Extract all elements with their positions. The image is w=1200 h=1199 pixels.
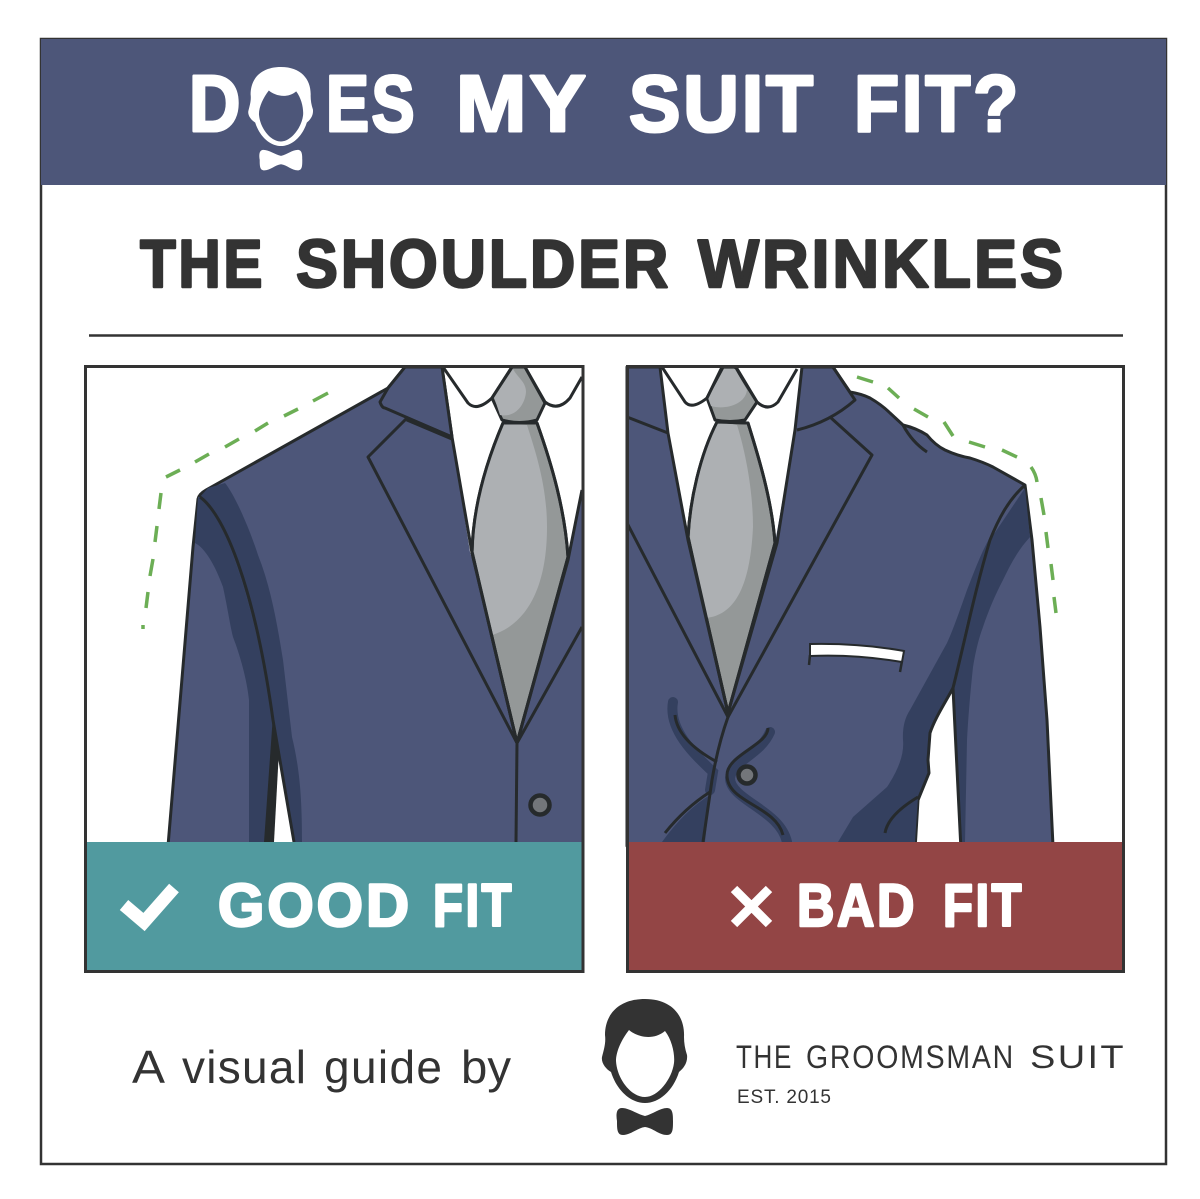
- button wrinkles: [672, 702, 787, 842]
- footer credit: by: [461, 1041, 511, 1093]
- label: bad fit: FIT: [943, 872, 1024, 939]
- label: bad fit: [629, 842, 1123, 970]
- title: [189, 59, 1021, 148]
- label: good fit: [87, 842, 582, 970]
- title: ES: [326, 59, 417, 148]
- collar: [443, 367, 582, 407]
- collar: [662, 367, 797, 407]
- jacket body: [168, 367, 583, 846]
- tie: [688, 367, 775, 713]
- label: good fit: FIT: [433, 872, 514, 939]
- sleeve gap: [915, 688, 961, 850]
- footer credit: [132, 1041, 511, 1093]
- label: bad fit: BAD: [797, 872, 917, 939]
- lapels: [368, 367, 582, 743]
- subtitle: THE: [140, 226, 265, 302]
- sleeve gap: [273, 747, 293, 842]
- brand name: SUIT: [1030, 1039, 1126, 1075]
- green shoulder guide: [143, 393, 328, 629]
- title: D: [189, 59, 243, 148]
- green shoulder guide: [857, 377, 1056, 613]
- sleeve and body shading: [953, 488, 1030, 842]
- panel: bad fit: [627, 366, 1124, 972]
- sleeve seam: [953, 485, 1025, 688]
- lapels: [627, 367, 872, 717]
- brand name: THE: [736, 1039, 793, 1075]
- icon: groom head in title: [248, 67, 313, 170]
- button: [530, 796, 550, 814]
- title: SUIT: [629, 59, 816, 148]
- sleeve shading: [200, 483, 302, 842]
- header banner: [41, 39, 1166, 185]
- jacket closure: [516, 743, 517, 842]
- brand name: [736, 1039, 1126, 1075]
- shirt: [442, 367, 582, 700]
- subtitle: SHOULDER: [296, 226, 671, 302]
- subtitle: [140, 226, 1066, 302]
- shoulder wrinkle: [903, 425, 927, 452]
- sleeve seam: [200, 497, 294, 842]
- pocket square: [810, 644, 904, 662]
- title: FIT?: [854, 59, 1021, 148]
- footer credit: visual: [182, 1041, 306, 1093]
- title: MY: [456, 59, 589, 148]
- footer credit: A: [132, 1041, 165, 1093]
- panel: good fit: [86, 366, 583, 972]
- label: good fit: GOOD: [218, 872, 412, 939]
- footer credit: guide: [324, 1041, 442, 1093]
- shirt: [660, 367, 802, 713]
- icon: groomsman logo: [602, 999, 687, 1135]
- subtitle: WRINKLES: [698, 226, 1066, 302]
- tie: [472, 367, 568, 743]
- established date: EST. 2015: [737, 1087, 831, 1108]
- icon: cross: [734, 889, 769, 924]
- brand name: GROOMSMAN: [806, 1039, 1015, 1075]
- jacket body: [627, 367, 1053, 846]
- button: [738, 766, 756, 784]
- icon: check mark: [124, 888, 174, 922]
